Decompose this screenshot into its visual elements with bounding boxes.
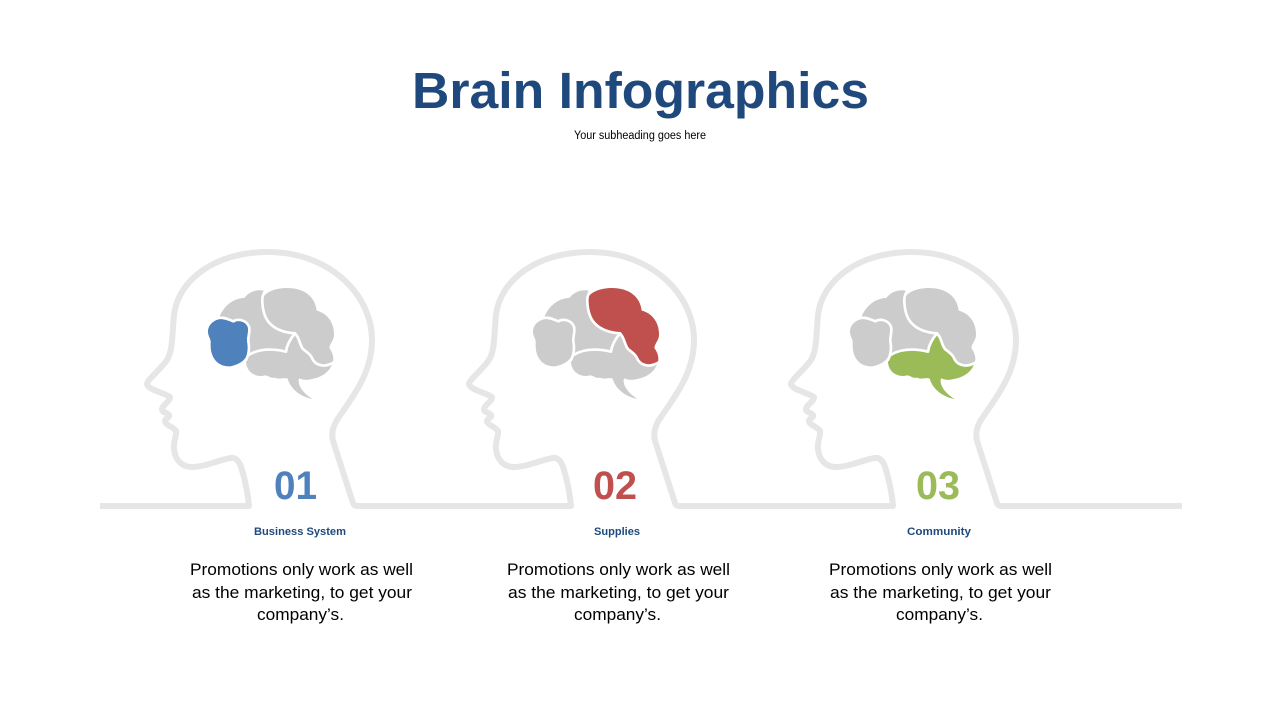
subheading: Your subheading goes here <box>574 130 706 142</box>
body text <box>507 560 730 624</box>
brain 3 <box>850 288 977 399</box>
body text: company’s. <box>257 605 344 624</box>
brain 2 <box>533 288 660 399</box>
label: Supplies <box>594 526 640 538</box>
body text: Promotions only work as well <box>190 560 413 579</box>
body text: Promotions only work as well <box>507 560 730 579</box>
body text: as the marketing, to get your <box>830 583 1051 602</box>
body text: company’s. <box>896 605 983 624</box>
label: Business System <box>254 526 346 538</box>
body text: Promotions only work as well <box>829 560 1052 579</box>
panel: supplies <box>400 252 796 624</box>
body text <box>829 560 1052 624</box>
body text: as the marketing, to get your <box>508 583 729 602</box>
number 01: 01 <box>274 464 317 508</box>
number 03: 03 <box>916 464 960 508</box>
number 02: 02 <box>593 464 637 508</box>
panel: business system <box>100 252 413 624</box>
highlighted lobe: blue <box>208 319 249 366</box>
highlighted lobe: green <box>888 333 975 399</box>
body text <box>190 560 413 624</box>
label: Community <box>907 526 972 538</box>
body text: as the marketing, to get your <box>192 583 412 602</box>
head outline 2 <box>400 252 796 506</box>
panel: community <box>791 252 1182 624</box>
title: Brain Infographics <box>412 62 869 119</box>
body text: company’s. <box>574 605 661 624</box>
brain 1 <box>208 288 335 399</box>
head outline 3 <box>791 252 1182 506</box>
highlighted lobe: red <box>587 288 659 366</box>
head outline 1 <box>100 252 405 506</box>
